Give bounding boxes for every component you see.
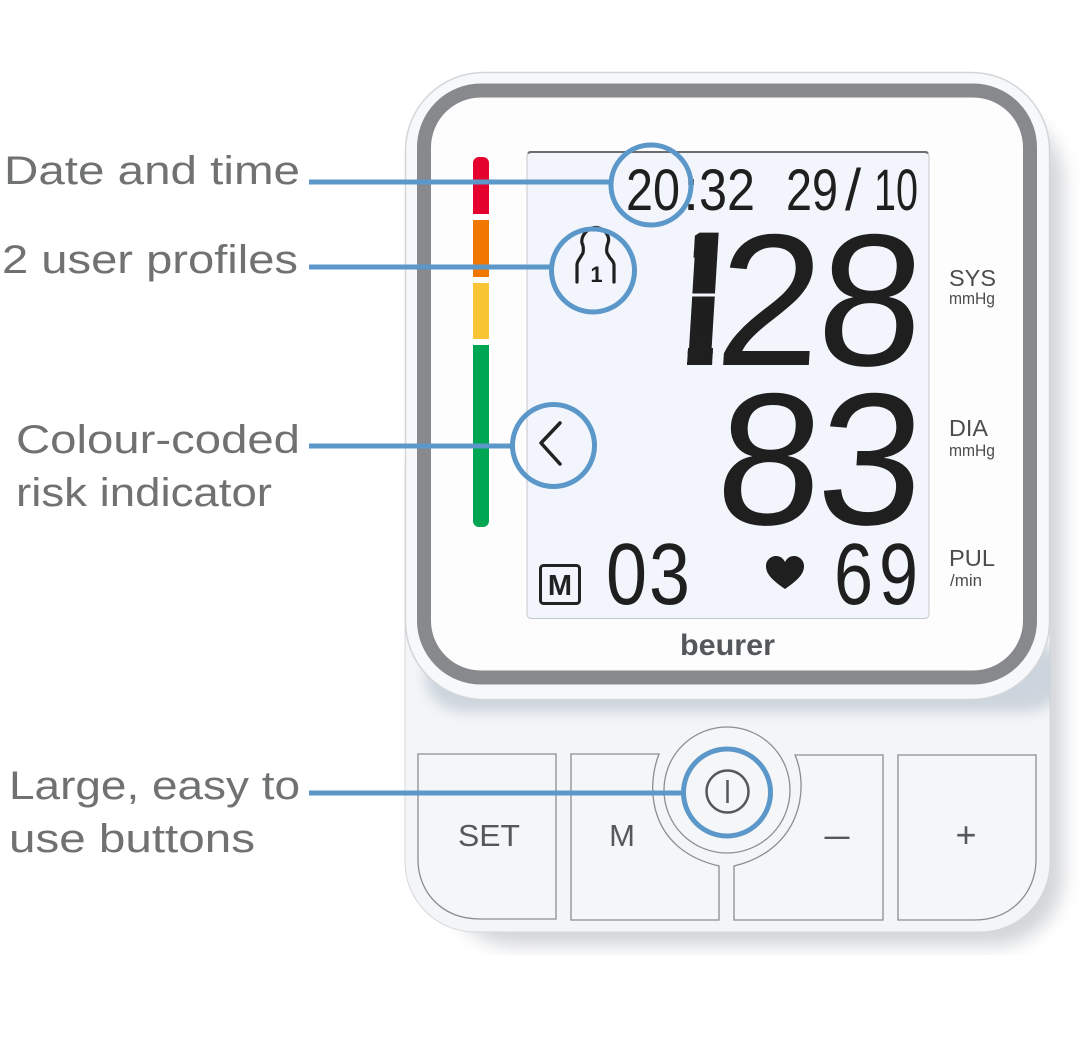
label: DIA mmHg: mmHg — [949, 442, 995, 460]
label: PUL per min: PUL — [949, 545, 995, 571]
colour-coded risk bar — [473, 157, 489, 527]
button: SET: SET — [458, 818, 520, 853]
label text: use buttons — [9, 817, 255, 861]
button: M: M — [609, 818, 635, 853]
panel: device base — [405, 400, 1050, 932]
label: SYS mmHg: SYS — [949, 265, 996, 291]
highlight circle — [512, 404, 594, 486]
head shadow on base — [425, 640, 1065, 712]
LCD: time and date: 10 — [874, 158, 918, 223]
LCD top edge — [528, 152, 928, 154]
grey display ring — [424, 90, 1030, 678]
panel: display head — [406, 72, 1050, 700]
LCD background — [527, 152, 929, 618]
LCD: diastolic reading 83 — [711, 354, 930, 564]
label: DIA mmHg — [949, 415, 995, 460]
label: SYS mmHg — [949, 265, 996, 308]
label: PUL per min: /min — [950, 572, 982, 590]
yellow segment — [473, 283, 489, 339]
device shadow — [445, 110, 1063, 946]
label text: risk indicator — [16, 471, 272, 515]
button: plus — [898, 755, 1036, 920]
highlight circle — [552, 229, 634, 312]
panel: LCD screen — [527, 152, 929, 618]
LCD: time and date: 29 — [786, 158, 838, 223]
button: minus: – — [824, 814, 850, 855]
LCD: memory number 03: 3 — [649, 526, 690, 623]
callout: risk indicator — [16, 404, 594, 515]
button: M — [571, 754, 719, 920]
icon: heart — [766, 556, 804, 589]
red segment — [473, 157, 489, 214]
icon: risk chevron — [541, 423, 560, 464]
device: blood pressure monitor — [405, 72, 1065, 946]
LCD: time and date: / — [845, 158, 862, 223]
highlight circle — [684, 749, 770, 836]
leader line — [309, 790, 684, 796]
button: plus: + — [955, 814, 977, 855]
callout: date and time — [4, 145, 691, 225]
LCD: time and date: 20 — [626, 158, 680, 223]
leader line — [309, 180, 612, 184]
callout: large buttons — [9, 749, 770, 861]
LCD: pulse reading 69: 9 — [879, 526, 918, 623]
icon: user profile — [577, 228, 614, 287]
LCD: time and date: 32 — [699, 158, 755, 223]
icon: memory M box — [540, 566, 580, 604]
LCD: time and date: : — [683, 158, 699, 223]
leader line — [309, 444, 513, 448]
label text: 2 user profiles — [2, 238, 298, 282]
button: power — [664, 727, 790, 853]
LCD: diastolic reading 83: 3 — [812, 354, 930, 564]
label: SYS mmHg: mmHg — [949, 290, 995, 308]
LCD: systolic reading 128: 1 — [641, 195, 759, 405]
label text: Large, easy to — [9, 764, 300, 808]
label text: Colour-coded — [16, 418, 300, 462]
label text — [9, 764, 300, 861]
LCD: systolic reading 128: 2 — [711, 195, 829, 405]
label text: Date and time — [4, 149, 300, 193]
label: DIA mmHg: DIA — [949, 415, 989, 441]
button: SET — [418, 754, 556, 919]
button: minus — [734, 755, 883, 920]
orange segment — [473, 220, 489, 277]
icon: memory M box: M — [548, 570, 572, 602]
callout: user profiles — [2, 229, 634, 312]
label: PUL per min — [949, 545, 995, 590]
label text — [16, 418, 300, 515]
LCD: systolic reading 128 — [687, 232, 914, 367]
leader line — [309, 264, 552, 270]
icon: user profile: 1 — [590, 262, 603, 287]
LCD: pulse reading 69: 6 — [834, 526, 873, 623]
brand: beurer: beurer — [680, 629, 775, 662]
highlight circle — [611, 145, 691, 225]
green segment — [473, 345, 489, 527]
LCD: memory number 03: 0 — [606, 526, 647, 623]
LCD: systolic reading 128: 8 — [812, 195, 930, 405]
LCD: diastolic reading 83: 8 — [711, 354, 829, 564]
